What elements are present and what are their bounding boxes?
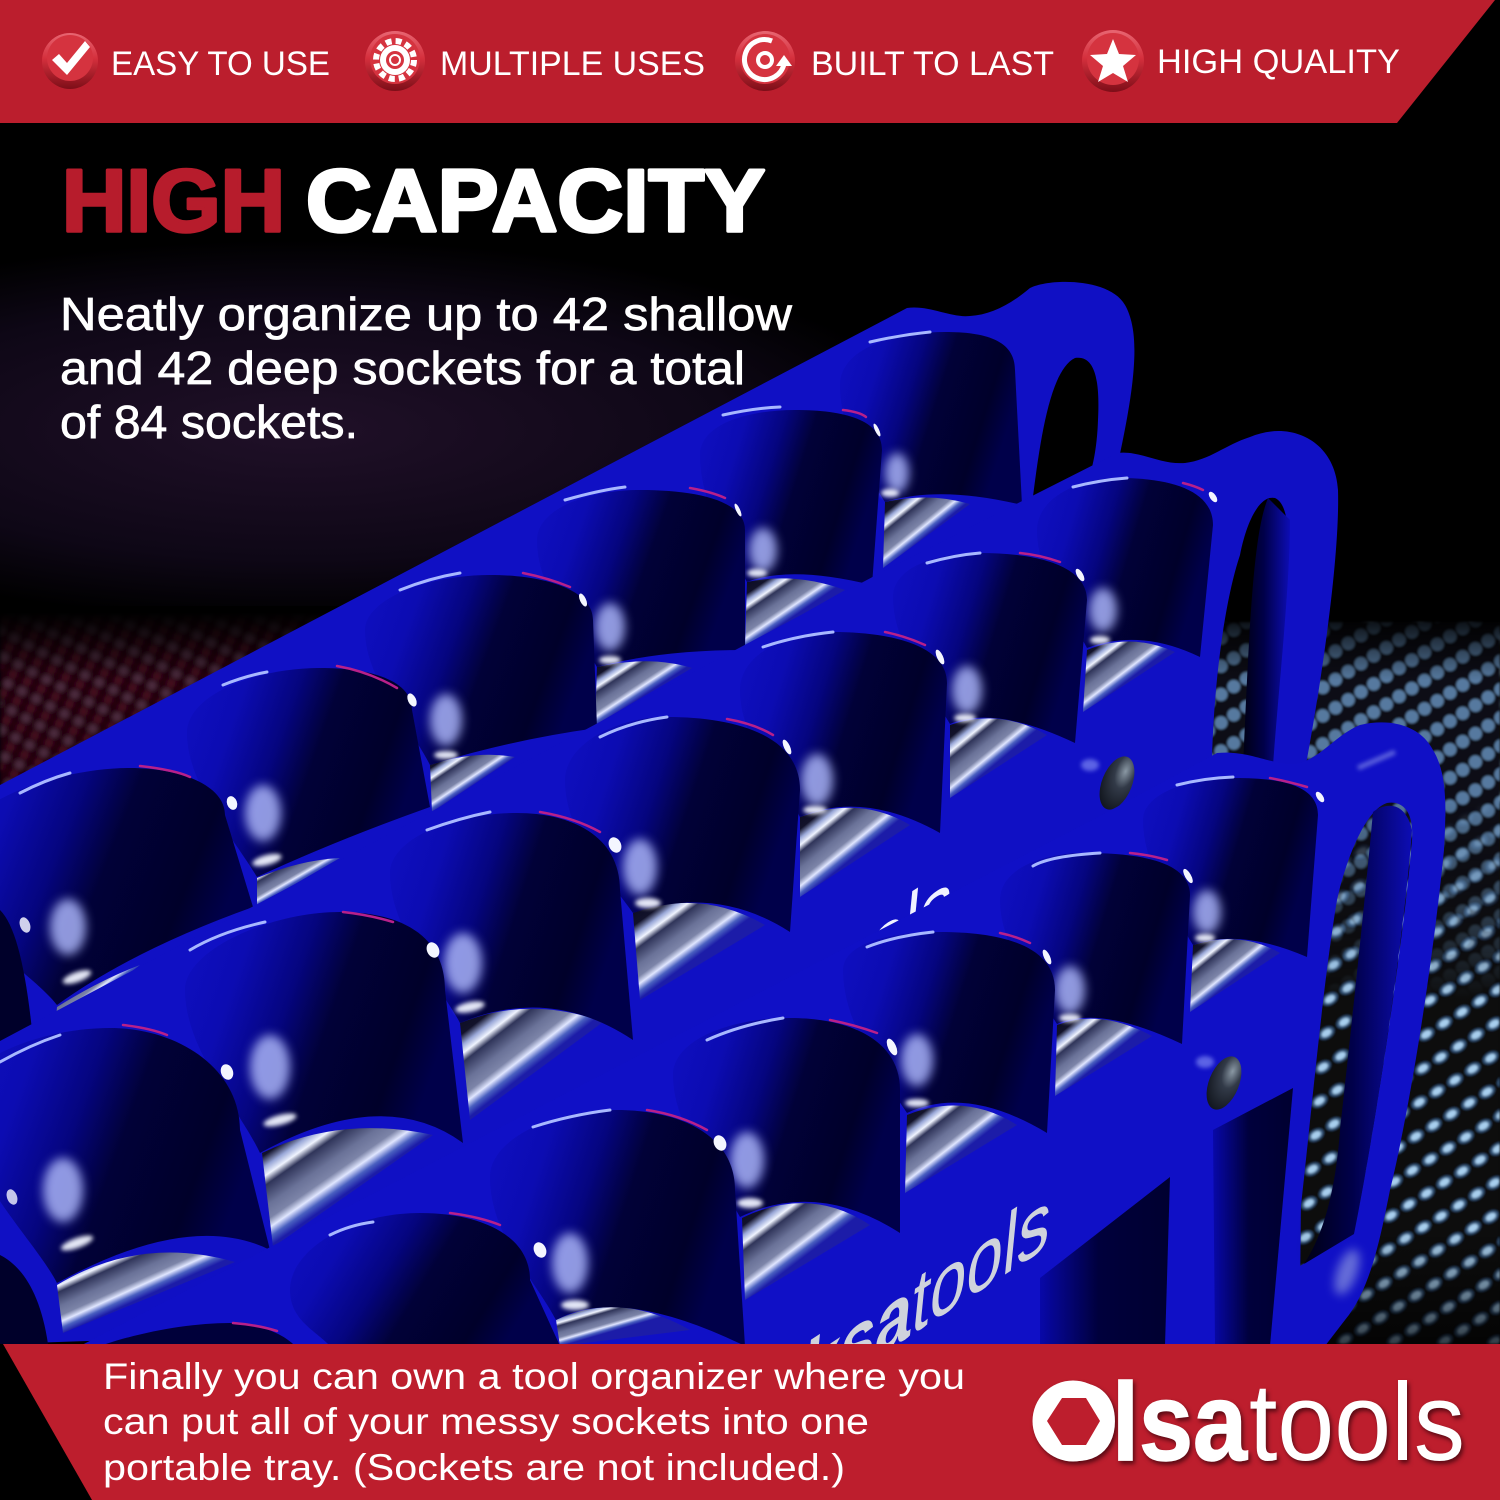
carbon fibre mat: right blue zone <box>1212 621 1500 1344</box>
front tray dark windows <box>1040 1088 1293 1346</box>
bottom text: Finally you can own a tool organizer where you <box>103 1356 965 1397</box>
bottom text <box>103 1356 965 1488</box>
front tray socket D <box>673 1018 900 1300</box>
middle tray brand text: ols <box>863 847 957 1001</box>
feature: built to last <box>735 31 1054 91</box>
front socket tray <box>84 722 1446 1344</box>
icon: gear <box>365 31 425 91</box>
back tray socket 3 <box>365 573 597 812</box>
feature: multiple uses <box>365 31 705 91</box>
front tray handle highlights <box>1329 752 1395 1298</box>
middle tray socket c <box>740 632 947 897</box>
back tray socket 1 <box>0 766 253 1030</box>
middle tray socket d <box>565 717 800 1000</box>
feature: easy to use: EASY TO USE <box>111 45 330 83</box>
middle tray rivet <box>1079 756 1134 810</box>
front tray socket C <box>843 932 1055 1193</box>
bottom text: portable tray. (Sockets are not included.) <box>103 1447 845 1488</box>
bottom text: can put all of your messy sockets into one <box>103 1401 869 1442</box>
carbon fibre mat: left red zone <box>0 606 420 812</box>
top feature bar <box>0 0 1495 123</box>
feature: built to last: BUILT TO LAST <box>811 45 1054 83</box>
front tray brand text: ksatools <box>798 1166 1056 1426</box>
feature: high quality <box>1082 30 1400 92</box>
description text: and 42 deep sockets for a total <box>60 342 745 394</box>
back tray socket 6 <box>840 332 1022 568</box>
heading <box>62 151 765 250</box>
front tray handle inner wall <box>1304 806 1412 1264</box>
feature: easy to use <box>42 33 330 89</box>
feature: high quality: HIGH QUALITY <box>1157 43 1400 81</box>
back tray socket 2 <box>187 666 430 906</box>
middle tray socket a <box>1037 478 1219 712</box>
front tray socket B <box>1000 853 1195 1096</box>
middle tray socket g <box>0 1025 270 1333</box>
icon: star <box>1082 30 1144 92</box>
middle tray socket f <box>185 912 463 1247</box>
heading: HIGH <box>62 151 285 250</box>
heading: CAPACITY <box>306 151 765 250</box>
front tray socket A <box>1143 777 1326 1012</box>
middle tray socket b <box>893 553 1087 798</box>
logo: tools <box>1249 1361 1465 1484</box>
logo <box>1032 1361 1465 1484</box>
middle tray socket h <box>0 1188 48 1344</box>
description text: of 84 sockets. <box>60 396 358 448</box>
icon: check mark <box>42 33 98 89</box>
front tray socket E <box>490 1110 745 1346</box>
middle socket tray <box>0 431 1338 1344</box>
icon: cycle gear <box>735 31 795 91</box>
back tray socket 4 <box>537 487 745 725</box>
back tray socket 5 <box>700 407 882 647</box>
feature: multiple uses: MULTIPLE USES <box>440 45 705 83</box>
description text <box>60 288 793 448</box>
middle tray socket e <box>390 812 633 1120</box>
front tray socket G <box>100 1323 295 1346</box>
front tray socket F <box>290 1213 560 1346</box>
socket trays photo <box>0 282 1445 1426</box>
back tray socket 0 <box>0 910 32 1041</box>
front tray rivet <box>1194 1054 1242 1110</box>
logo: O <box>1034 1361 1120 1484</box>
logo: lsa <box>1112 1361 1248 1484</box>
middle tray handle inner wall <box>1243 498 1290 780</box>
back socket tray <box>0 282 1134 1041</box>
bottom panel <box>0 1344 1500 1500</box>
description text: Neatly organize up to 42 shallow <box>60 288 793 340</box>
